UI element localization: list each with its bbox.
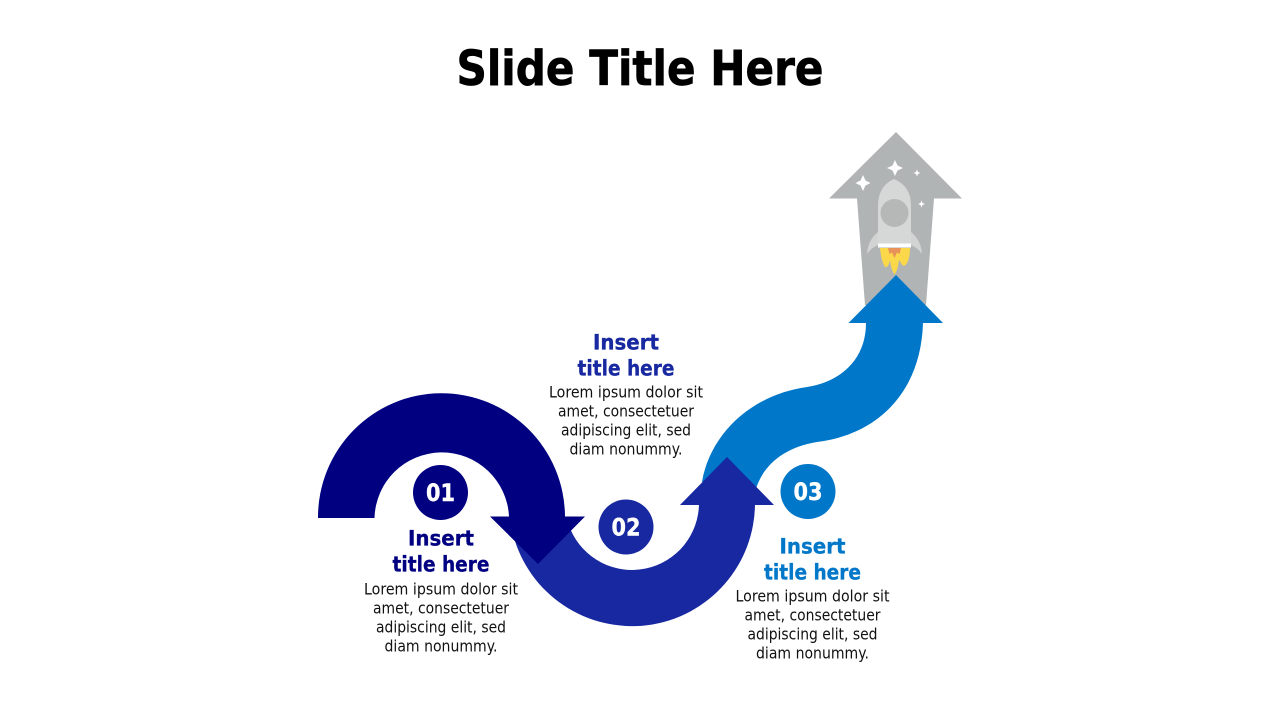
arrow 3: light blue S-curve	[702, 275, 943, 492]
text block: step 01: title here	[392, 552, 490, 576]
text block: step 03: diam nonummy.	[756, 644, 869, 662]
text block: step 03: adipiscing elit, sed	[748, 624, 878, 644]
text block: step 02: Lorem ipsum dolor sit	[549, 382, 703, 402]
stars	[856, 160, 925, 208]
grey arrow	[829, 132, 962, 305]
icon: grey destination arrow with rocket	[829, 132, 962, 305]
rocket fins	[867, 232, 922, 254]
step 01 badge: 01	[426, 479, 455, 507]
text block: step 01: Lorem ipsum dolor sit	[364, 580, 518, 598]
text block: step 02: amet, consectetuer	[558, 402, 694, 420]
title: Slide Title Here	[456, 41, 824, 97]
text block: step 03: Lorem ipsum dolor sit	[736, 586, 890, 606]
text block: step 02	[549, 330, 703, 458]
text block: step 03: amet, consectetuer	[744, 606, 881, 624]
text block: step 02: Insert	[593, 330, 659, 354]
text block: step 01	[364, 526, 518, 656]
text block: step 01: Insert	[408, 526, 474, 550]
text block: step 01: adipiscing elit, sed	[376, 618, 506, 636]
text block: step 03: title here	[764, 560, 861, 584]
step 02 badge: 02	[612, 514, 640, 542]
text block: step 01: amet, consectetuer	[373, 598, 509, 618]
text block: step 01: diam nonummy.	[384, 636, 498, 656]
rocket porthole	[880, 199, 908, 227]
arrow 1: navy arc	[318, 393, 585, 564]
text block: step 02: diam nonummy.	[570, 440, 682, 458]
step 03 badge: 03	[794, 478, 822, 506]
rocket base band	[878, 244, 911, 248]
rocket flames	[880, 248, 910, 274]
text block: step 02: adipiscing elit, sed	[561, 420, 691, 440]
step 01 badge	[413, 465, 468, 520]
step 02 badge	[598, 500, 654, 554]
text block: step 02: title here	[578, 356, 674, 380]
arrow 2: royal blue arc	[513, 457, 774, 626]
text block: step 03: Insert	[780, 534, 846, 558]
rocket body	[878, 179, 911, 244]
step 03 badge	[780, 464, 836, 519]
text block: step 03	[736, 534, 890, 662]
